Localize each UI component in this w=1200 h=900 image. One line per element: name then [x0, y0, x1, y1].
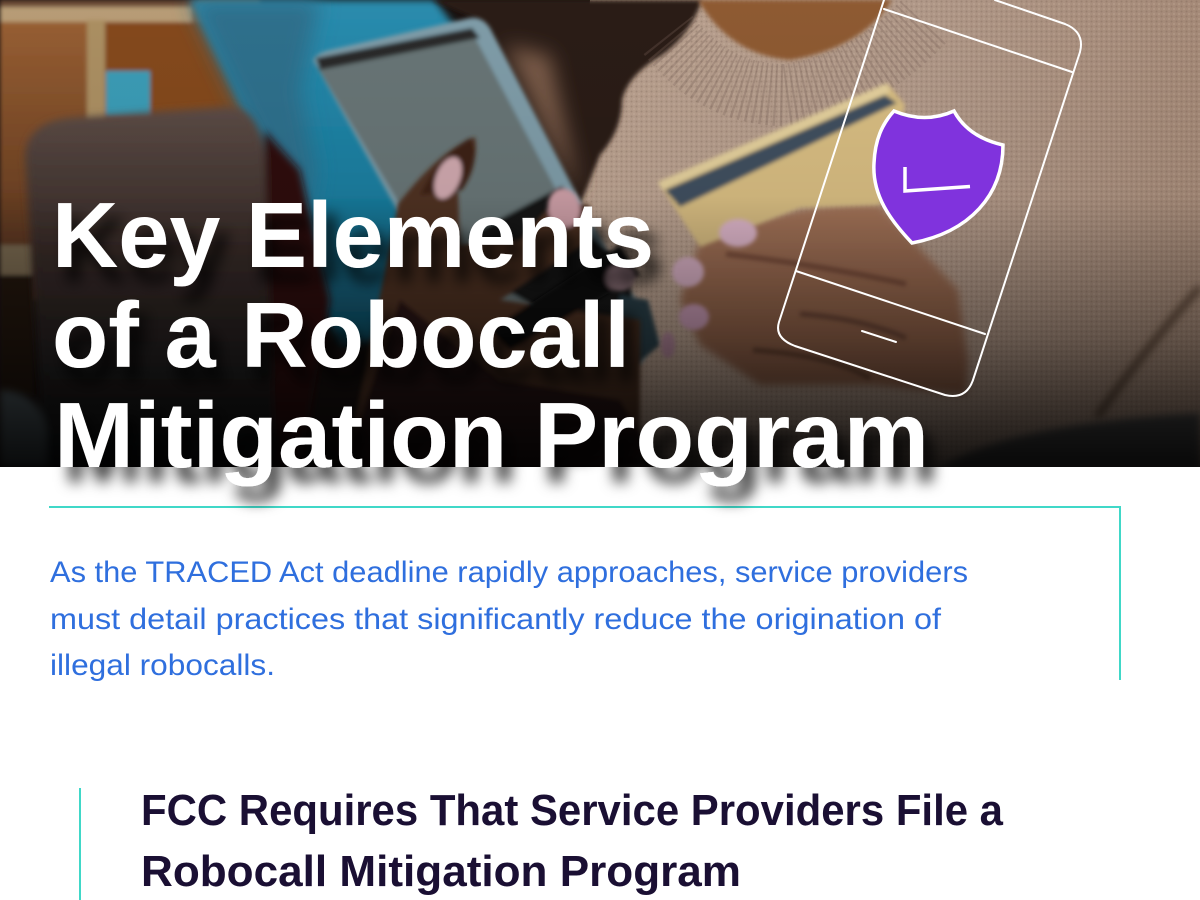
title [52, 183, 929, 487]
intro text: must detail practices that significantly reduce the origination of [50, 603, 942, 636]
title: of a Robocall [52, 283, 630, 387]
teal pillow [187, 0, 456, 347]
phone-holding hand [345, 137, 660, 467]
hero photo: woman with phone and credit card [0, 0, 1200, 470]
hair [432, 0, 702, 205]
section heading [80, 786, 1003, 900]
neck and ribbed collar [668, 0, 925, 95]
phone outline icon [778, 0, 1081, 396]
intro text: As the TRACED Act deadline rapidly approaches, service providers [50, 556, 968, 589]
section heading: FCC Requires That Service Providers File a [141, 786, 1003, 835]
section heading: Robocall Mitigation Program [141, 847, 741, 896]
intro text: illegal robocalls. [50, 649, 275, 682]
sweater [570, 0, 1200, 470]
dark gradient overlay [0, 122, 1200, 467]
intro text [50, 556, 968, 682]
couch [0, 107, 330, 467]
credit card [658, 83, 968, 395]
phone held in hand [313, 18, 660, 370]
title: Mitigation Program [54, 383, 929, 487]
bookshelf background [0, 0, 260, 298]
fingers and nails of card hand [661, 219, 906, 378]
icon: purple shield with check [874, 111, 1003, 243]
teal bracket around intro [49, 507, 1120, 680]
title: Key Elements [52, 183, 654, 287]
